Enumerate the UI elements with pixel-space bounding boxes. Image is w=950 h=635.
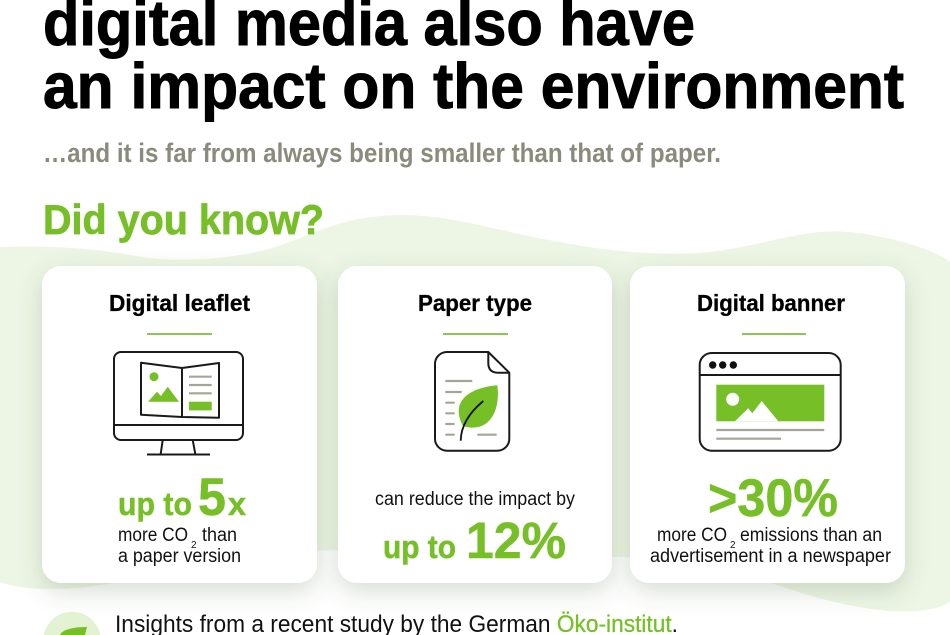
description: more CO2 emissions than an advertisement in a newspaper: emissions than an (740, 525, 882, 546)
description: more CO2 than a paper version: than (202, 525, 237, 546)
stat: up to 12%: 12% (466, 512, 566, 569)
icon: leaf badge (44, 612, 100, 635)
stat: up to 5x: 5 (198, 468, 226, 527)
stat: up to 12%: up to (383, 529, 456, 565)
subtitle: …and it is far from always being smaller than that of paper. (43, 138, 721, 168)
stat: up to 12% (383, 512, 566, 569)
description: more CO2 emissions than an advertisement in a newspaper: 2 (730, 540, 736, 551)
description: can reduce the impact by: can reduce the impact by (375, 489, 575, 510)
title (43, 0, 904, 122)
panel: digital leaflet (42, 266, 317, 583)
heading: paper type: Paper type (418, 290, 532, 316)
description: more CO2 than a paper version: a paper version (118, 546, 241, 567)
heading: digital leaflet: Digital leaflet (109, 290, 250, 316)
description: more CO2 than a paper version: more CO (118, 525, 188, 546)
description: more CO2 emissions than an advertisement in a newspaper: advertisement in a newspaper (650, 546, 892, 567)
background wave (0, 215, 950, 611)
stat: up to 5x (118, 468, 246, 527)
icon: document with leaf (435, 352, 509, 451)
icon: monitor with open book (114, 352, 243, 454)
heading: digital banner: Digital banner (697, 290, 845, 316)
heading: did you know: Did you know? (43, 196, 324, 243)
description: more CO2 emissions than an advertisement in a newspaper: more CO (657, 525, 727, 546)
icon: browser window with banner (700, 353, 841, 451)
stat: more than 30%: >30% (708, 469, 838, 528)
panel: paper type (338, 266, 612, 583)
stat: up to 5x: up to (118, 486, 192, 522)
title: an impact on the environment (43, 50, 904, 122)
description: more CO2 than a paper version: 2 (191, 540, 197, 551)
description: more CO2 than a paper version (118, 525, 241, 567)
panel: digital banner (630, 266, 905, 583)
description: more CO2 emissions than an advertisement in a newspaper (650, 525, 892, 567)
stat: up to 5x: x (228, 486, 246, 522)
